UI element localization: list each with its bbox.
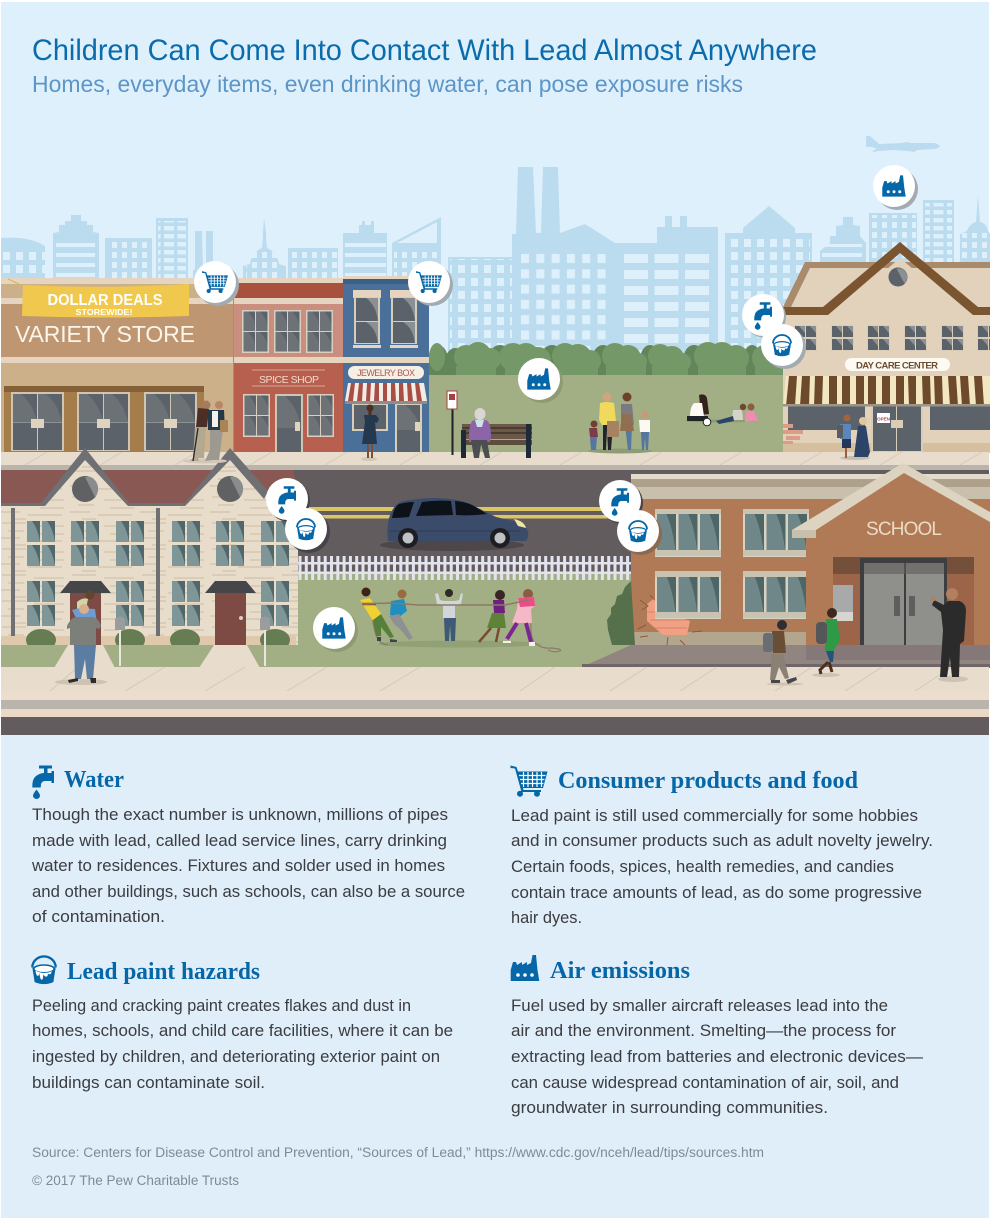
people: picnic with soccer ball	[686, 394, 758, 426]
plaza	[582, 645, 990, 667]
text: water: and other buildings, such as schools, can also be a source	[32, 882, 465, 901]
lower sidewalk and curb	[1, 667, 989, 735]
people: children in tug of war	[360, 588, 561, 652]
person: student with backpack	[763, 620, 803, 686]
person: teacher	[930, 588, 968, 682]
icon: paint bucket	[32, 956, 56, 984]
icon marker: tap, day care	[742, 294, 786, 338]
heading: water: Water	[64, 766, 124, 793]
subtitle: Homes, everyday items, even drinking water, can pose exposure risks	[32, 71, 743, 97]
people: elderly man and helper	[183, 400, 228, 464]
icon marker: tap, school	[599, 480, 643, 524]
banner: Dollar Deals	[8, 279, 201, 318]
park lawn	[429, 375, 783, 453]
child in pink and purple	[503, 589, 535, 646]
title: Children Can Come Into Contact With Lead Almost Anywhere	[32, 35, 817, 67]
child in purple top	[479, 590, 506, 642]
exposed brick	[783, 424, 803, 444]
school building	[582, 463, 990, 668]
hedge	[607, 581, 635, 645]
child in yellow shirt	[360, 588, 397, 642]
Day care center building: DAY CARE CENTER	[856, 360, 938, 372]
people: family	[588, 392, 652, 454]
text: water	[31, 805, 465, 926]
park trees	[428, 342, 787, 376]
Day care center building: OPEN	[877, 416, 890, 422]
icon marker: paint bucket, school	[617, 510, 662, 555]
people: adult and child at day care	[837, 414, 870, 460]
icon marker: shopping cart, jewelry box	[408, 261, 453, 306]
child with arms raised	[435, 589, 463, 641]
text: air emissions	[511, 996, 923, 1117]
icon marker: shopping cart, variety store	[194, 261, 239, 306]
text: consumer products: Lead paint is still used commercially for some hobbies	[511, 806, 918, 825]
entrance	[833, 557, 974, 646]
text: water: Though the exact number is unknown, millions of pipes	[32, 805, 448, 824]
rope	[362, 600, 529, 605]
shrubs	[26, 629, 290, 651]
copyright: © 2017 The Pew Charitable Trusts	[32, 1173, 239, 1188]
person: man carrying child on shoulders	[55, 590, 107, 685]
Variety store building	[1, 278, 234, 453]
section: lead paint hazards	[32, 956, 453, 1092]
awning: striped	[345, 383, 427, 404]
person: woman at jewelry store	[361, 404, 379, 461]
text: lead paint: ingested by children, and deteriorating exterior paint on	[32, 1047, 440, 1066]
text: air emissions: can cause widespread contamination of air, soil, and	[511, 1073, 899, 1092]
banner: Dollar Deals: DOLLAR DEALS	[48, 292, 162, 309]
heading: lead paint hazards: Lead paint hazards	[67, 958, 260, 985]
text: water: of contamination.	[32, 907, 165, 926]
car	[380, 498, 528, 551]
icon marker: factory, playground	[313, 607, 358, 652]
sky panel	[1, 2, 989, 735]
icon marker: factory, airplane	[873, 165, 918, 210]
text: air emissions: air and the environment. Smelting—the process for	[511, 1021, 896, 1040]
section: consumer products and food	[510, 766, 933, 927]
Spice shop building	[234, 278, 343, 453]
cracked paint brick patch	[638, 595, 702, 646]
Jewelry Box building	[343, 276, 429, 453]
text: consumer products: Certain foods, spices, health remedies, and candies	[511, 857, 894, 876]
text: lead paint: buildings can contaminate soil.	[32, 1073, 265, 1092]
panel: explanatory text	[1, 735, 989, 1218]
text: consumer products	[511, 806, 933, 927]
bus stop sign	[447, 391, 457, 455]
icon marker: tap, houses	[266, 478, 310, 522]
person: senior on bench	[469, 408, 491, 458]
heading: air emissions: Air emissions	[550, 957, 690, 984]
icon marker: paint bucket, day care	[761, 324, 806, 369]
store name: Variety Store: VARIETY STORE	[15, 321, 195, 347]
lawn lower	[298, 573, 632, 668]
Spice shop building: SPICE SHOP	[259, 374, 319, 386]
person: student in green	[812, 608, 840, 677]
text: air emissions: groundwater in surrounding communities.	[511, 1098, 828, 1117]
text: air emissions: extracting lead from batteries and electronic devices—	[511, 1047, 923, 1066]
illustration: city scene	[1, 136, 990, 735]
picket fence	[298, 556, 632, 580]
mailboxes	[115, 616, 270, 666]
skyline	[1, 167, 990, 380]
text: air emissions: Fuel used by smaller aircraft releases lead into the	[511, 996, 888, 1015]
text: water: made with lead, called lead service lines, carry drinking	[32, 831, 447, 850]
road	[1, 470, 989, 573]
text: lead paint	[32, 996, 453, 1092]
banner: Dollar Deals: STOREWIDE!	[76, 307, 133, 317]
section: water	[31, 766, 465, 926]
text: water: water to residences. Fixtures and solder used in homes	[31, 856, 445, 875]
airplane	[866, 136, 940, 152]
source note: Source: Centers for Disease Control and Prevention, “Sources of Lead,” https://www.cdc.gov/nceh/lead/tips/sources.htm	[32, 1145, 764, 1160]
icon: factory	[511, 955, 539, 981]
icon: shopping cart	[510, 766, 548, 797]
Day care center building	[783, 242, 990, 453]
heading: consumer products and food: Consumer products and food	[558, 767, 858, 794]
row houses	[1, 448, 298, 668]
text: consumer products: contain trace amounts of lead, as do some progressive	[511, 883, 922, 902]
school gable	[806, 470, 990, 645]
text: lead paint: homes, schools, and child care facilities, where it can be	[32, 1021, 453, 1040]
sidewalk upper	[1, 452, 989, 470]
text: consumer products: hair dyes.	[511, 908, 582, 927]
section: air emissions	[511, 955, 923, 1117]
school sign: SCHOOL	[866, 519, 942, 540]
icon marker: factory, park	[518, 358, 563, 403]
text: consumer products: and in consumer products such as adult novelty jewelry.	[511, 831, 933, 850]
icon: water tap	[32, 766, 54, 799]
Jewelry Box building: JEWELRY BOX	[357, 368, 415, 378]
child in blue shirt	[389, 590, 413, 640]
text: lead paint: Peeling and cracking paint creates flakes and dust in	[32, 996, 411, 1015]
icon marker: paint bucket, houses	[285, 508, 330, 553]
bench	[461, 424, 532, 458]
awning: striped	[783, 376, 990, 406]
